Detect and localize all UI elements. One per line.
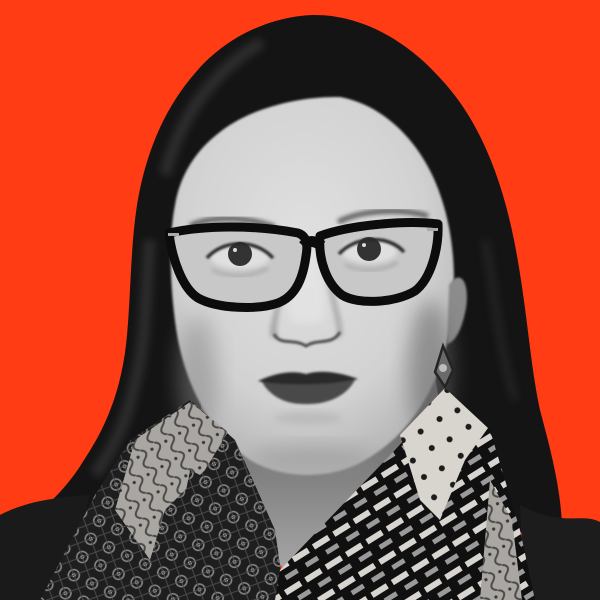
neck	[200, 375, 445, 570]
face	[171, 97, 467, 475]
scarf	[40, 388, 535, 600]
glasses bridge	[303, 242, 322, 246]
cheek shading	[178, 315, 218, 435]
left lens	[178, 232, 302, 303]
glasses	[160, 215, 445, 315]
ear	[447, 278, 467, 344]
nose highlight	[288, 250, 324, 322]
frames	[169, 227, 307, 307]
earring	[435, 346, 453, 387]
nostril line	[274, 332, 340, 346]
right lens	[324, 227, 430, 297]
hair highlights	[95, 42, 515, 475]
hair	[42, 15, 562, 545]
eyebrows	[190, 219, 275, 227]
jacket	[0, 495, 600, 600]
nose shadow	[270, 262, 290, 340]
lips	[258, 372, 358, 404]
